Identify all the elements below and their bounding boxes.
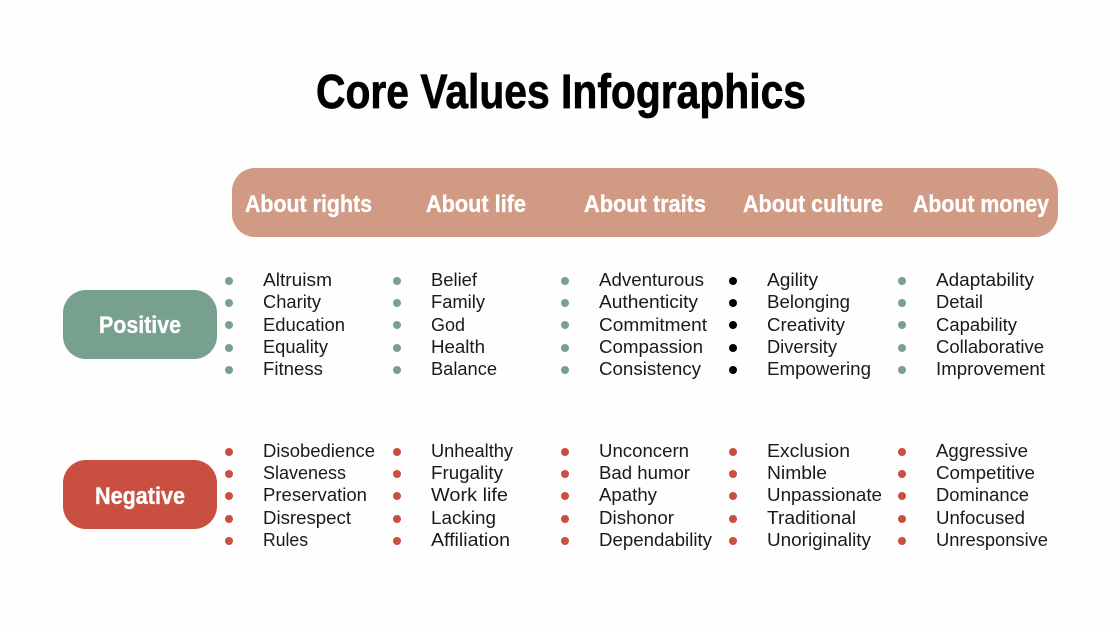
negative list: about money: Unfocused [936,508,1025,528]
negative list: about traits: Dependability [599,530,712,550]
negative list: about money: Competitive [936,463,1035,483]
positive list: about money: Adaptability [936,270,1034,290]
negative list: about traits [561,441,712,550]
positive list: about traits: Adventurous [599,270,704,290]
negative list: about rights: Disobedience [263,441,375,461]
negative list: about traits: Dishonor [599,508,674,528]
positive list: about culture: Agility [767,270,818,290]
negative list: about culture: Unpassionate [767,485,882,505]
row label: negative [63,460,217,529]
header: about life: About life [426,191,526,218]
positive list: about rights: Education [263,315,345,335]
header: about traits: About traits [584,191,706,218]
positive list: about money: Improvement [936,359,1045,379]
positive list: about money [898,270,1045,379]
header: about money: About money [913,191,1050,218]
negative list: about money: Unresponsive [936,530,1048,550]
positive list: about rights [225,270,345,379]
positive list: about culture [729,270,871,379]
positive list: about traits: Authenticity [599,292,698,312]
positive list: about rights: Charity [263,292,321,312]
negative list: about traits: Bad humor [599,463,690,483]
positive list: about life: Health [431,337,485,357]
positive list: about rights: Equality [263,337,328,357]
negative list: about culture: Exclusion [767,441,850,461]
negative list: about life: Affiliation [431,530,510,550]
negative list: about life: Frugality [431,463,503,483]
positive list: about traits: Compassion [599,337,703,357]
negative list: about life: Work life [431,485,508,505]
negative list: about money [898,441,1048,550]
positive list: about life: Belief [431,270,478,290]
positive list: about traits: Consistency [599,359,701,379]
negative list: about culture: Nimble [767,463,827,483]
row label: negative: Negative [95,483,185,510]
positive list: about life: Balance [431,359,497,379]
row label: positive [63,290,217,359]
positive list: about culture: Empowering [767,359,871,379]
negative list: about culture: Traditional [767,508,856,528]
negative list: about life: Lacking [431,508,496,528]
positive list: about culture: Creativity [767,315,845,335]
positive list: about traits [561,270,707,379]
negative list: about rights [225,441,375,550]
header band [232,168,1058,237]
positive list: about culture: Belonging [767,292,850,312]
negative list: about life: Unhealthy [431,441,513,461]
negative list: about culture [729,441,882,550]
negative list: about traits: Unconcern [599,441,689,461]
positive list: about traits: Commitment [599,315,707,335]
negative list: about culture: Unoriginality [767,530,871,550]
header: about culture: About culture [743,191,883,218]
negative list: about traits: Apathy [599,485,657,505]
negative list: about money: Dominance [936,485,1029,505]
positive list: about culture: Diversity [767,337,837,357]
header: about rights: About rights [245,191,372,218]
title: Core Values Infographics [316,66,806,119]
positive list: about money: Capability [936,315,1017,335]
positive list: about life: Family [431,292,485,312]
negative list: about life [393,441,513,550]
positive list: about rights: Altruism [263,270,332,290]
positive list: about money: Detail [936,292,983,312]
negative list: about rights: Disrespect [263,508,351,528]
positive list: about life [393,270,497,379]
positive list: about life: God [431,315,465,335]
positive list: about rights: Fitness [263,359,323,379]
negative list: about rights: Rules [263,530,308,550]
negative list: about rights: Slaveness [263,463,346,483]
negative list: about money: Aggressive [936,441,1028,461]
negative list: about rights: Preservation [263,485,367,505]
positive list: about money: Collaborative [936,337,1044,357]
row label: positive: Positive [99,312,181,339]
